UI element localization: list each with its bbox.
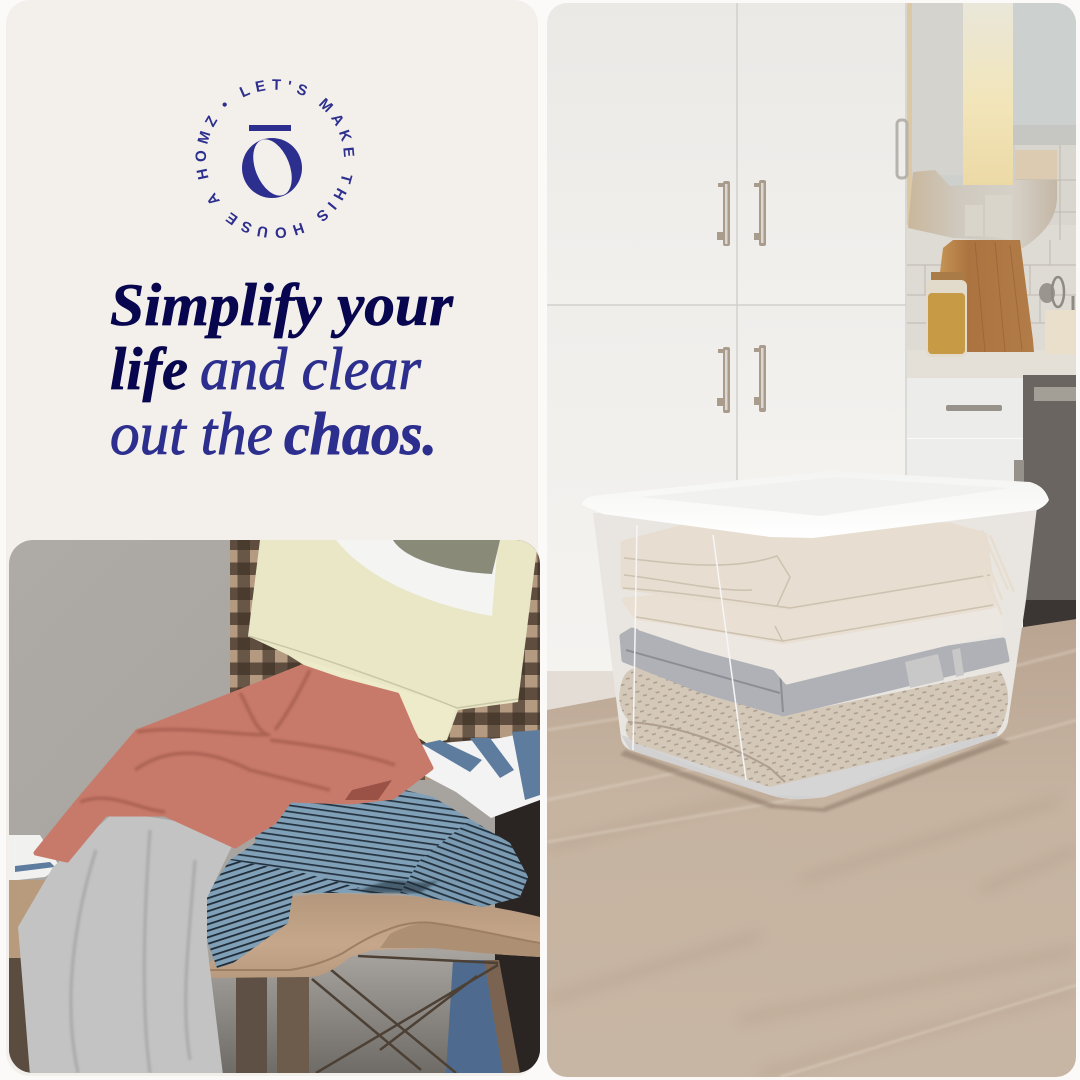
storage bin	[582, 471, 1049, 799]
lower side door	[907, 439, 1023, 509]
grey blanket folds	[71, 830, 195, 1073]
floor planks	[547, 790, 1077, 1075]
white blanket	[635, 610, 1001, 682]
bin body	[593, 507, 1037, 799]
bin shadow	[620, 738, 1010, 812]
wall	[9, 540, 540, 1073]
upper right handle	[897, 120, 907, 178]
spatula handle	[1072, 296, 1074, 312]
grey blanket	[18, 814, 232, 1075]
chair leg centre one	[236, 970, 267, 1073]
coral underside shadow	[345, 780, 392, 800]
reflected bowl	[908, 170, 1057, 248]
photo: tidy storage bin in kitchen	[547, 3, 1077, 1077]
side handle	[1014, 460, 1024, 484]
left side striped towel	[9, 835, 60, 881]
jar of grains	[926, 272, 967, 357]
handle: upper right	[754, 180, 766, 246]
chair leg centre two	[277, 970, 309, 1073]
blue shirt shadow	[360, 880, 440, 893]
chair crossbars	[312, 956, 498, 1073]
door seams	[547, 3, 906, 480]
bin bottom tint	[621, 725, 1000, 799]
chair seat left part	[9, 880, 46, 958]
seat shaded underside	[380, 923, 540, 957]
logo: circular tagline: • LET'S MAKE THIS HOUSE A HOMZ	[196, 79, 354, 238]
cream shirt	[248, 540, 538, 744]
blankets	[619, 525, 1014, 787]
cream shirt lower fold	[419, 738, 446, 743]
headline	[110, 272, 454, 467]
chair seat	[210, 894, 540, 978]
bin lid	[582, 471, 1049, 538]
chair leg right	[484, 960, 520, 1073]
handle: lower right	[754, 345, 766, 412]
cutting board	[940, 240, 1034, 352]
chair legs left	[9, 958, 30, 1072]
dishwasher handle	[1034, 387, 1076, 401]
headline: and clear	[200, 336, 422, 402]
dishwasher	[1023, 375, 1077, 610]
left towel blue stripe	[15, 862, 55, 872]
whisk	[1052, 277, 1064, 307]
lower left door	[547, 305, 737, 671]
upper left door	[547, 3, 737, 305]
headline: chaos.	[284, 401, 437, 467]
cream hem shadow	[248, 636, 518, 708]
wall below seat	[9, 970, 540, 1073]
grey collar inside	[393, 540, 500, 574]
bin seams	[633, 525, 746, 780]
blue-grey blanket	[622, 630, 1007, 714]
handle: upper left	[717, 181, 730, 246]
toe kick	[1023, 600, 1077, 630]
lid inner rim	[640, 477, 1010, 516]
utensil holder	[1045, 310, 1077, 354]
cream blanket top	[623, 525, 990, 608]
lower right door	[737, 306, 905, 480]
photo: messy clothes on chair	[9, 540, 545, 1075]
coral shirt folds	[80, 670, 395, 812]
headline: life	[110, 336, 188, 402]
baseboard	[547, 671, 640, 712]
coral shirt	[36, 667, 431, 860]
handle: lower left	[717, 347, 730, 413]
drawer handle	[946, 405, 1002, 411]
floor highlights	[547, 650, 1077, 1077]
striped blue shirt	[205, 787, 528, 968]
logo: o with macron mark	[242, 125, 302, 201]
cream blanket middle	[624, 578, 993, 642]
countertop	[907, 350, 1077, 378]
blue jeans below seat	[446, 960, 505, 1073]
blue-grey blanket bands	[905, 648, 964, 688]
logo badge	[196, 79, 354, 238]
reflected glass panes	[965, 195, 1012, 240]
backsplash tiles	[907, 145, 1077, 355]
dark background right	[495, 800, 540, 1073]
right side striped towel	[418, 730, 540, 818]
floor	[547, 619, 1077, 1077]
drawer	[907, 378, 1023, 438]
blue shirt right fold	[400, 820, 528, 907]
top blanket folds	[623, 556, 993, 642]
panel: left beige card	[6, 0, 538, 1076]
headline: Simplify your	[110, 272, 454, 338]
knit crease	[628, 722, 785, 782]
plaid shirt on chair back	[230, 540, 540, 780]
headline: out the	[110, 401, 273, 467]
blue shirt lower left fold	[205, 860, 360, 968]
upper right door	[737, 3, 907, 305]
knit blanket	[619, 668, 1008, 787]
spoon	[1039, 283, 1055, 303]
fringe	[968, 530, 1014, 615]
blue-grey blanket folds	[626, 650, 783, 712]
bin haze	[593, 507, 1037, 797]
seat piping	[210, 922, 540, 970]
reflective wall upper cabinet	[907, 3, 1077, 243]
white collar	[336, 540, 498, 616]
